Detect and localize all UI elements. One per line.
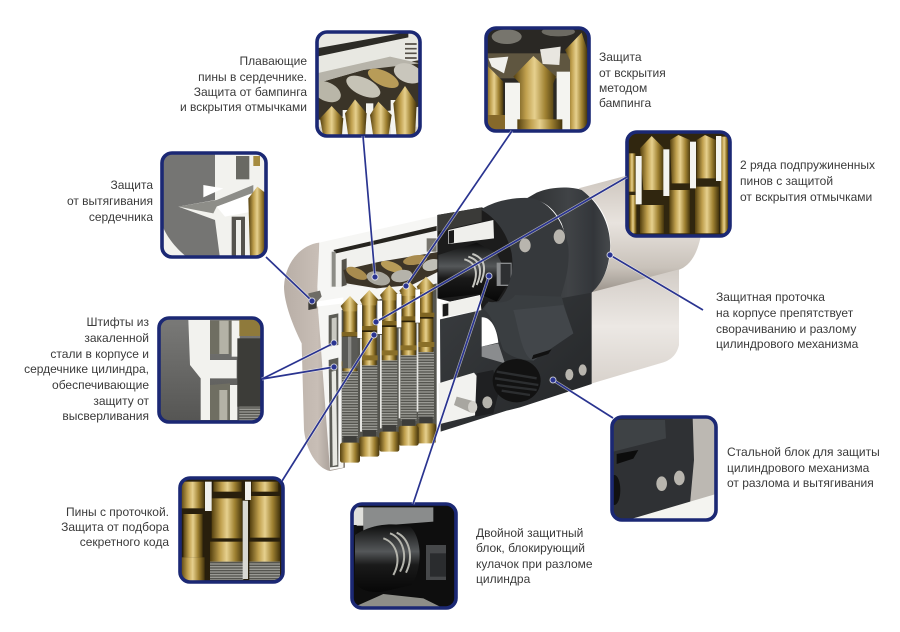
text: two rows of pins: 2 ряда подпружиненных (740, 158, 875, 172)
text: double protective block: блок, блокирующий (476, 541, 585, 555)
upper floating pins (343, 238, 442, 288)
inset: floating pins (318, 34, 418, 134)
text: bumping protection: Защита (599, 50, 642, 64)
text: double protective block: цилиндра (476, 572, 531, 586)
inset: core pull-out protection (162, 153, 267, 258)
keyhole opening (482, 317, 505, 363)
inset: steel block (614, 418, 714, 518)
inner barrel (438, 220, 512, 317)
text: hardened steel pins: обеспечивающие (52, 378, 149, 392)
text: double protective block: Двойной защитный (476, 526, 583, 540)
text: floating pins: Плавающие (240, 54, 307, 68)
text: steel block: от разлома и вытягивания (727, 476, 874, 490)
text: grooved pins: Пины с проточкой. (66, 505, 169, 519)
text: hardened steel pins: закаленной (84, 331, 149, 345)
cam arm (484, 295, 573, 361)
text: hardened steel pins: высверливания (62, 409, 149, 423)
pin chamber backing (342, 283, 437, 453)
text: floating pins: и вскрытия отмычками (180, 100, 307, 114)
text: bumping protection: от вскрытия (599, 66, 666, 80)
inset: double protective block (351, 503, 457, 610)
text: core pull-out: сердечника (89, 210, 153, 224)
text: hardened steel pins: защиту от (93, 394, 150, 408)
inset: grooved pins (179, 478, 284, 583)
text: protective groove: на корпусе препятствует (716, 306, 854, 320)
leader lines with dots (262, 131, 703, 504)
text: core pull-out: Защита (110, 178, 153, 192)
text: hardened steel pins: сердечнике цилиндра, (24, 362, 149, 376)
text: hardened steel pins: стали в корпусе и (50, 347, 149, 361)
text: double protective block: кулачок при разломе (476, 557, 593, 571)
text: floating pins: Защита от бампинга (194, 85, 307, 99)
text: protective groove: цилиндрового механизма (716, 337, 859, 351)
white cut faces left (308, 216, 437, 470)
rivets (519, 229, 587, 380)
text: two rows of pins: от вскрытия отмычками (740, 190, 872, 204)
spring hole (493, 359, 541, 402)
text: steel block: Стальной блок для защиты (727, 445, 880, 459)
text: grooved pins: секретного кода (80, 535, 169, 549)
text: two rows of pins: пинов с защитой (740, 174, 833, 188)
cylinder cutaway illustration (284, 166, 701, 471)
dark wall section (437, 207, 515, 313)
text: protective groove: Защитная проточка (716, 290, 825, 304)
text: core pull-out: от вытягивания (67, 194, 153, 208)
slot with pins (438, 370, 498, 424)
text: steel block: цилиндрового механизма (727, 461, 870, 475)
black plate lower (440, 283, 592, 432)
text: grooved pins: Защита от подбора (61, 520, 169, 534)
text: bumping protection: методом (599, 81, 647, 95)
text: hardened steel pins: Штифты из (87, 315, 149, 329)
nickel lower body right (590, 269, 679, 384)
black cap inner ring (482, 198, 569, 312)
nickel upper body right (578, 166, 701, 293)
text: protective groove: сворачиванию и разлому (716, 322, 856, 336)
inset: two rows of pins (628, 134, 728, 234)
inset: bumping protection (485, 27, 590, 132)
inset: hardened pins (158, 318, 263, 423)
black cap outer ring (527, 187, 610, 298)
spring-loaded pins (340, 277, 436, 463)
text: floating pins: пины в сердечнике. (198, 70, 307, 84)
text: bumping protection: бампинга (599, 96, 651, 110)
nickel left end (284, 243, 345, 471)
inset frames (159, 28, 730, 608)
